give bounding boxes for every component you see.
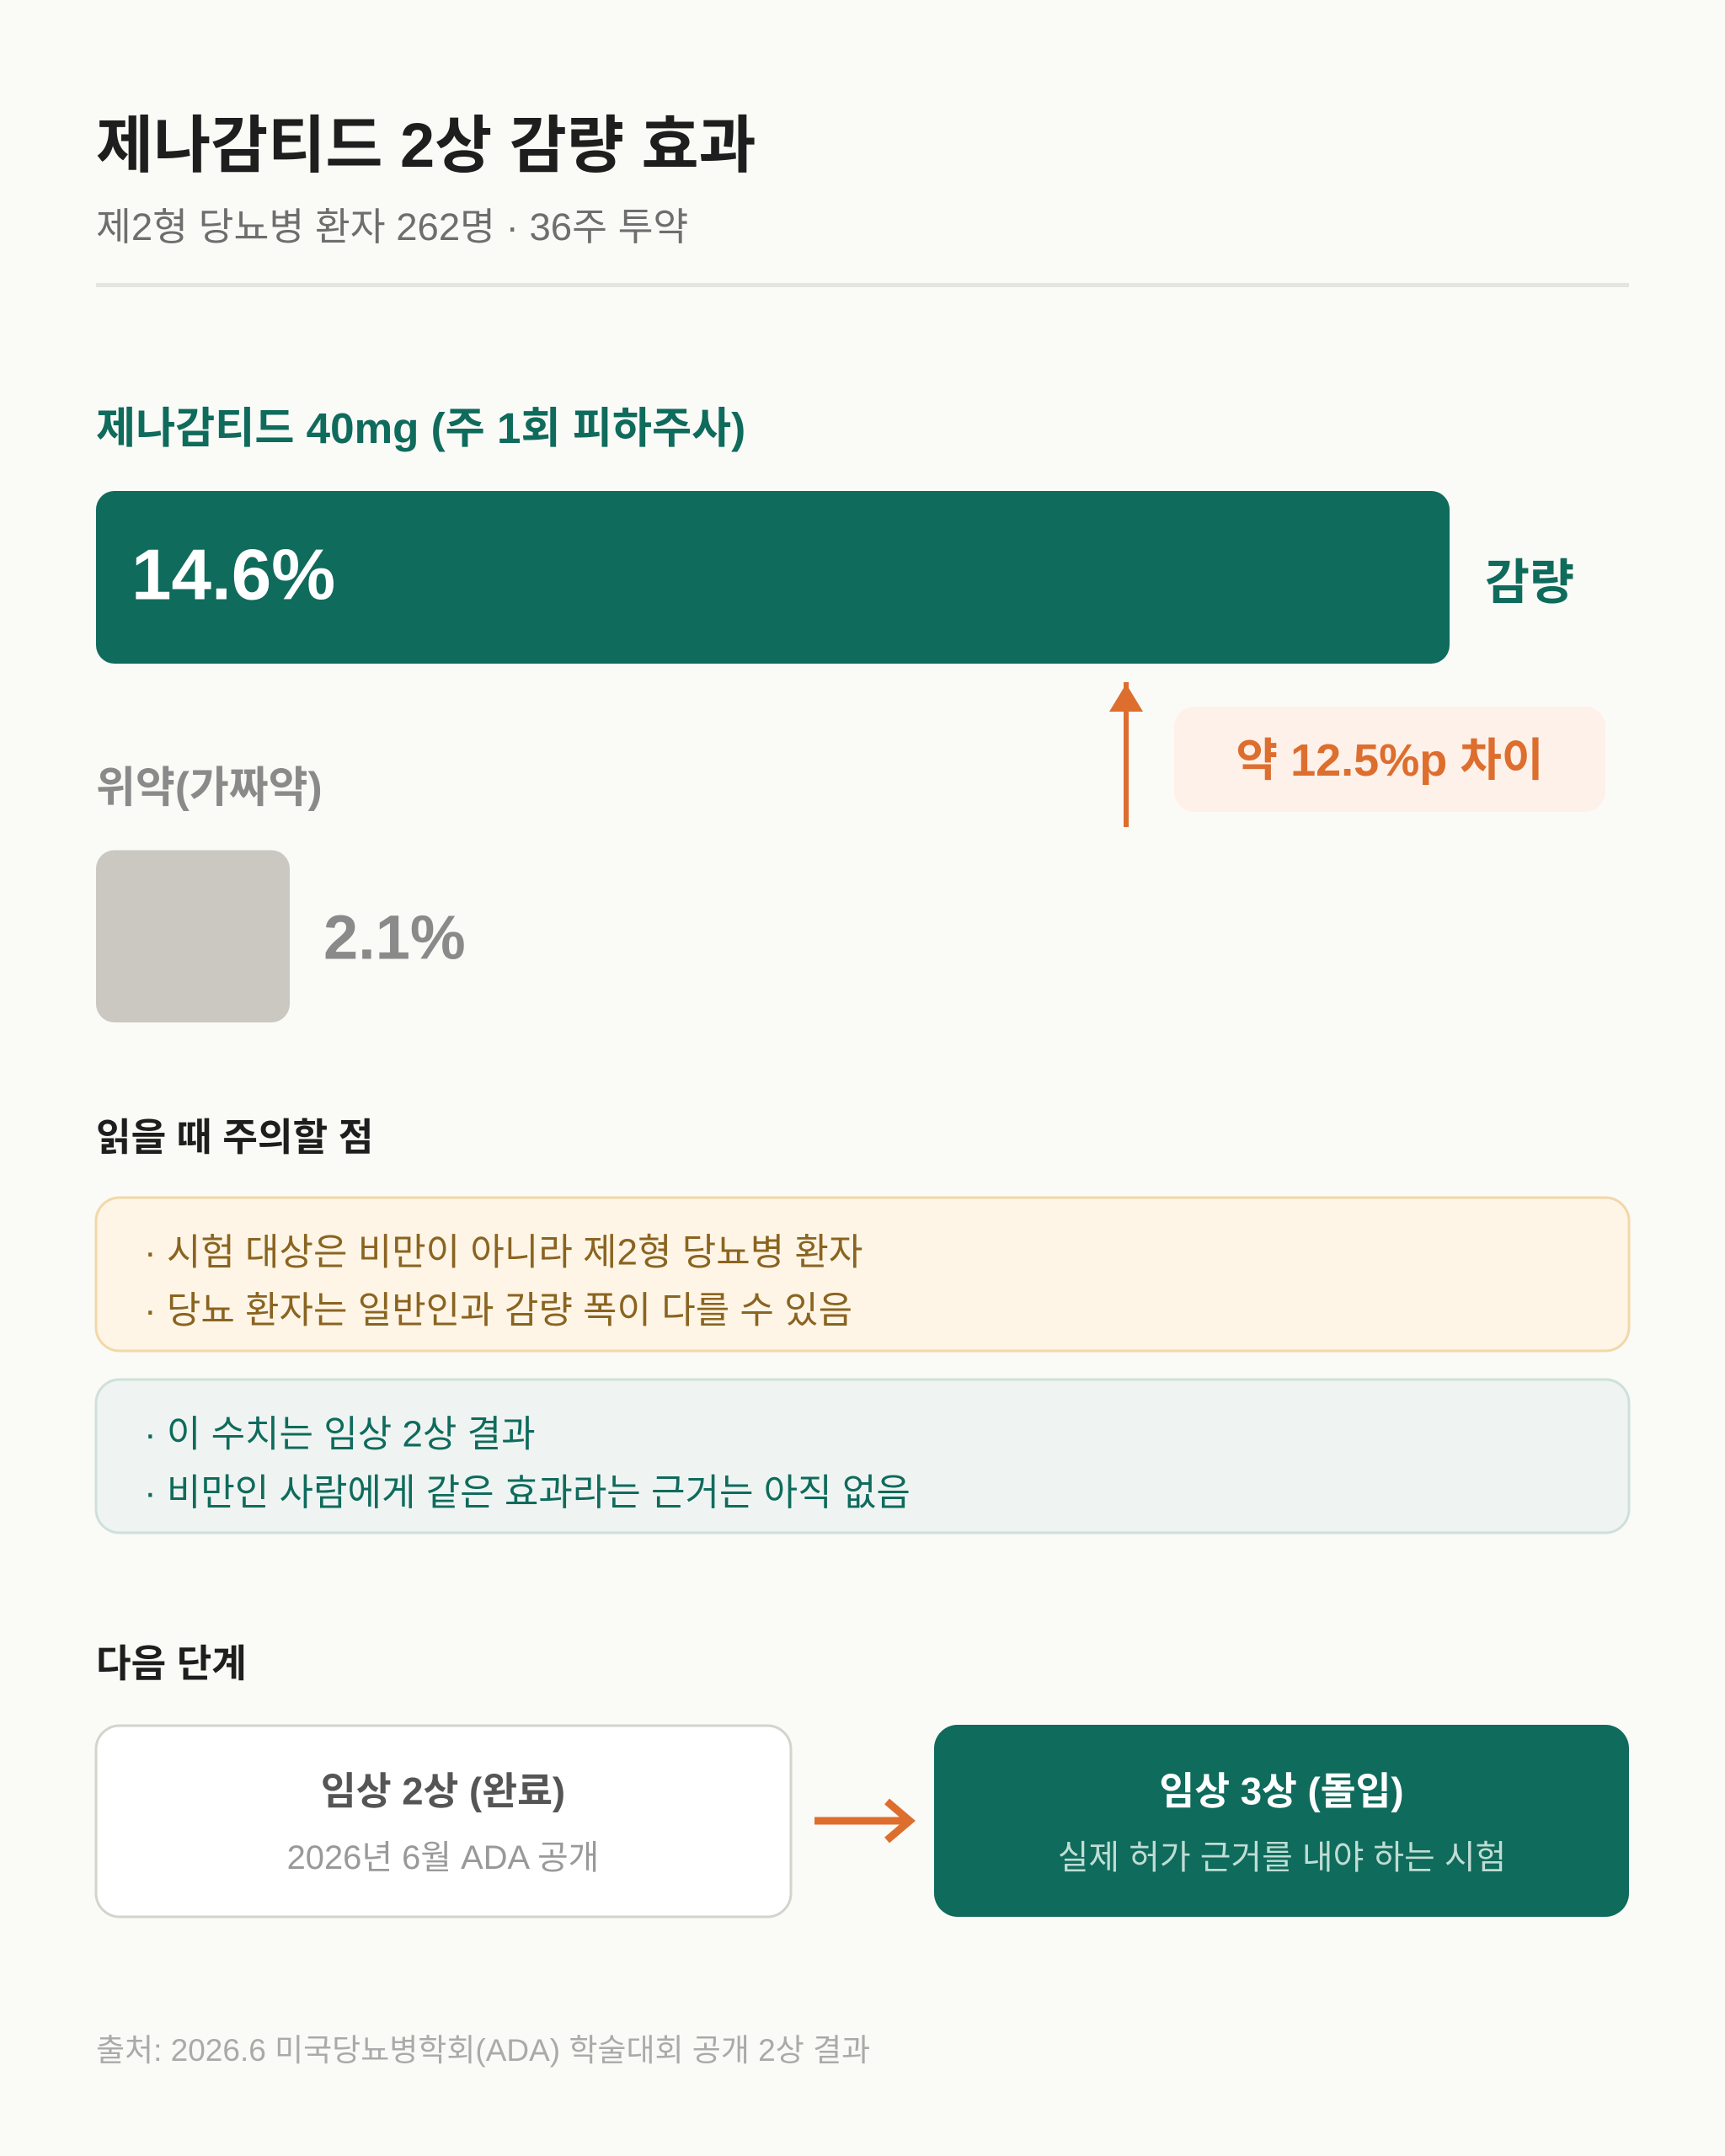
card: phase 3: 실제 허가 근거를 내야 하는 시험 (1058, 1839, 1506, 1876)
panel: teal caution: · 비만인 사람에게 같은 효과라는 근거는 아직 없음 (144, 1472, 911, 1513)
heading: drug arm: 제나감티드 40mg (주 1회 피하주사) (96, 404, 745, 452)
arrow: next phase (814, 1801, 910, 1840)
bar: drug 14.6%: 14.6% (131, 536, 335, 615)
source note: 출처: 2026.6 미국당뇨병학회(ADA) 학술대회 공개 2상 결과 (96, 2033, 870, 2068)
card: phase 2: 임상 2상 (완료) (321, 1770, 565, 1812)
value: placebo 2.1%: 2.1% (323, 903, 466, 972)
callout: difference (1174, 707, 1605, 812)
label: weight loss: 감량 (1485, 556, 1574, 610)
bar: drug 14.6% (96, 491, 1450, 664)
panel: amber caution: · 당뇨 환자는 일반인과 감량 폭이 다를 수 있음 (144, 1290, 852, 1331)
panel: amber caution: · 시험 대상은 비만이 아니라 제2형 당뇨병 환자 (144, 1231, 862, 1273)
subtitle: 제2형 당뇨병 환자 262명 · 36주 투약 (96, 205, 688, 248)
heading: next steps: 다음 단계 (96, 1642, 247, 1685)
card: phase 3 (934, 1725, 1629, 1917)
panel: amber caution (96, 1198, 1629, 1351)
panel: teal caution (96, 1380, 1629, 1533)
card: phase 3: 임상 3상 (돌입) (1159, 1770, 1404, 1812)
heading: placebo arm: 위약(가짜약) (96, 763, 323, 812)
heading: cautions: 읽을 때 주의할 점 (96, 1116, 373, 1159)
title: 제나감티드 2상 감량 효과 (96, 110, 756, 180)
callout: difference: 약 12.5%p 차이 (1236, 735, 1544, 786)
arrow: difference (1109, 682, 1143, 827)
card: phase 2: 2026년 6월 ADA 공개 (287, 1839, 599, 1876)
card: phase 2 (96, 1726, 791, 1917)
bar: placebo (96, 851, 290, 1022)
panel: teal caution: · 이 수치는 임상 2상 결과 (144, 1413, 536, 1455)
